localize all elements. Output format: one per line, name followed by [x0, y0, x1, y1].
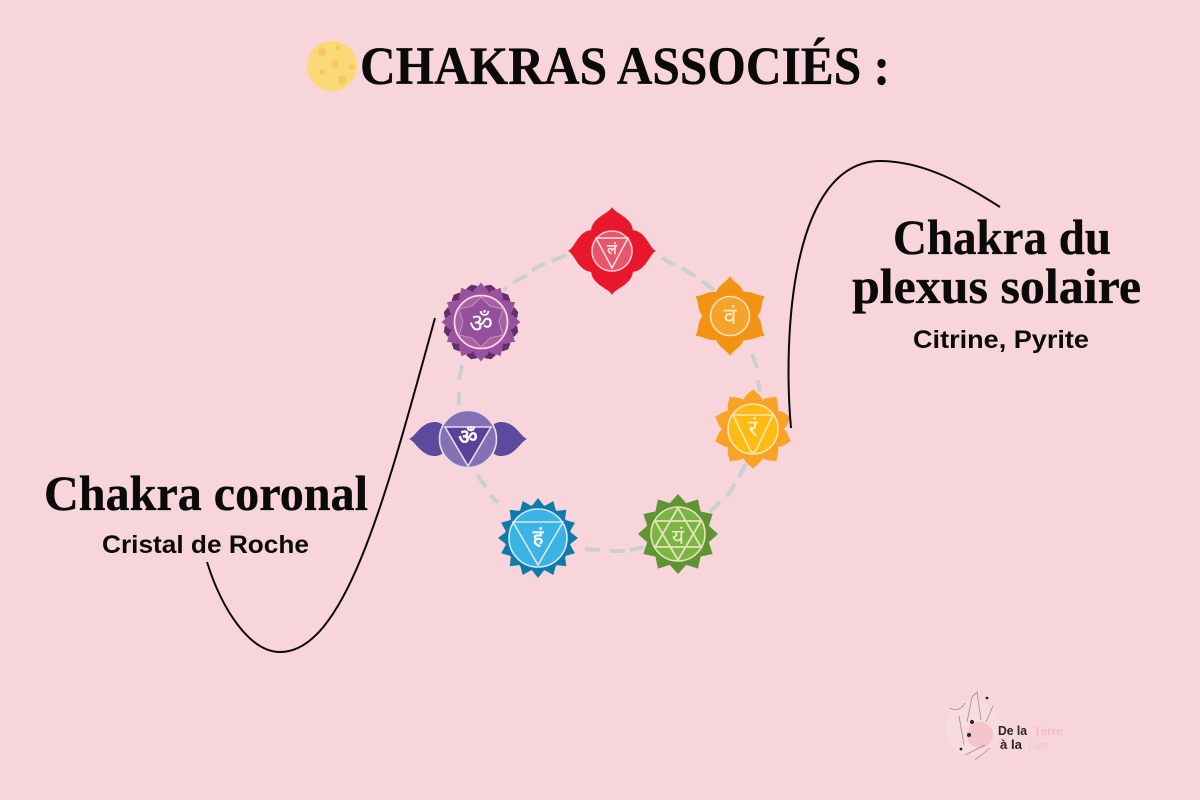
label: solar plexus chakra: plexus solaire — [852, 258, 1141, 314]
curve: connector to solar plexus chakra — [789, 161, 1000, 428]
dashed chakra circle — [459, 255, 760, 551]
chakra: crown (violet): ॐ — [469, 308, 493, 338]
logo — [945, 692, 1063, 760]
chakra: solar plexus (yellow) — [712, 389, 794, 469]
logo: Terre — [1033, 723, 1063, 738]
chakra: sacral (orange): वं — [724, 303, 738, 329]
chakra: third eye (indigo) — [409, 410, 527, 468]
logo: Lune — [1028, 737, 1048, 752]
icon: moon — [307, 41, 357, 91]
chakra: throat (blue) — [498, 498, 578, 578]
title — [307, 36, 890, 96]
chakra: heart (green) — [638, 494, 718, 574]
label: solar plexus chakra: Citrine, Pyrite — [913, 326, 1089, 354]
logo: à la — [1000, 737, 1023, 752]
chakra: crown (violet) — [442, 282, 520, 362]
label: solar plexus chakra — [852, 209, 1141, 354]
chakra: third eye (indigo): ॐ — [458, 425, 478, 449]
label: crown chakra: Chakra coronal — [44, 465, 368, 521]
label: solar plexus chakra: Chakra du — [893, 209, 1111, 265]
chakra: root (red): लं — [606, 241, 617, 257]
chakra: throat (blue): हं — [532, 527, 545, 549]
title text: CHAKRAS ASSOCIÉS : — [360, 36, 890, 96]
chakra: sacral (orange) — [688, 276, 772, 356]
chakra: root (red) — [568, 207, 656, 295]
chakra: solar plexus (yellow): रं — [748, 415, 758, 441]
logo: De la — [998, 723, 1028, 738]
label: crown chakra: Cristal de Roche — [102, 531, 309, 559]
curve: connector to crown chakra — [207, 318, 435, 652]
chakra: heart (green): यं — [672, 526, 685, 549]
label: crown chakra — [44, 465, 368, 559]
